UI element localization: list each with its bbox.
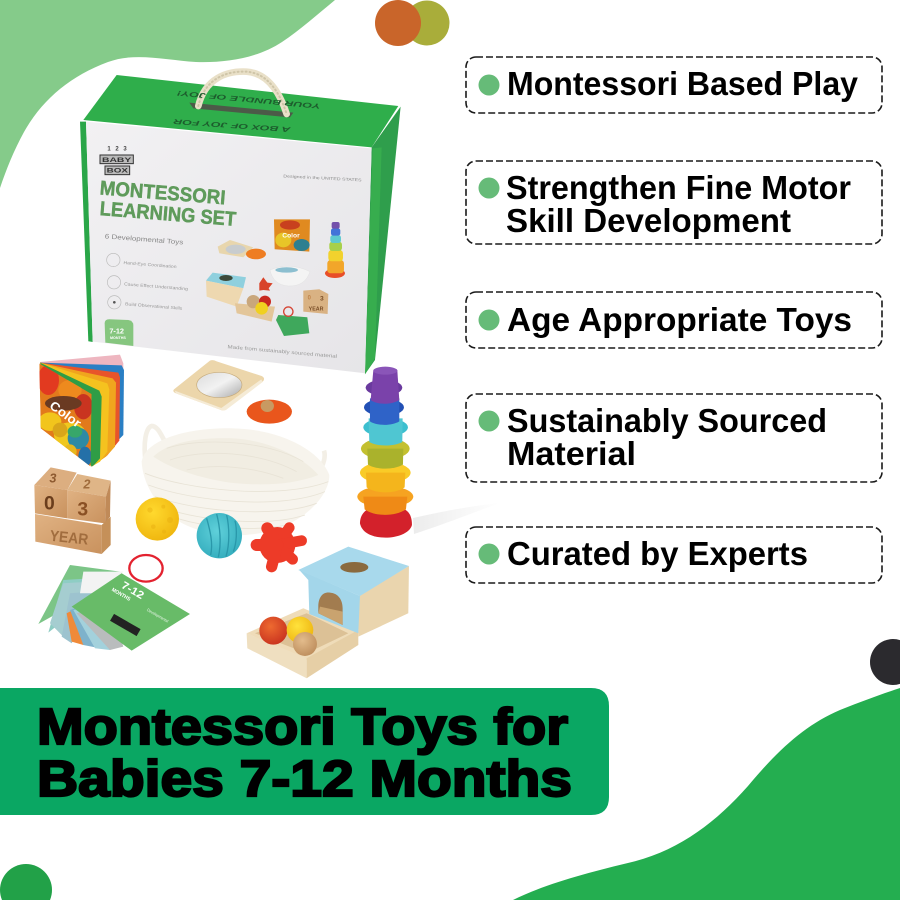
box top face [83, 75, 398, 147]
age badge: 7-12 [109, 326, 124, 335]
rope basket [142, 426, 329, 535]
blue sensory ball [197, 513, 242, 558]
flash cards [38, 555, 190, 651]
wooden date blocks: 3 [77, 500, 88, 521]
feature 3: Age Appropriate Toys: Age Appropriate Toys [507, 301, 852, 338]
box right side strip [365, 147, 382, 374]
board book [38, 355, 124, 467]
yellow sensory ball [136, 497, 179, 541]
wooden date blocks [34, 467, 111, 554]
brand logo: 1 2 3 [107, 147, 127, 153]
box title: MONTESSORI [99, 177, 226, 209]
headline banner: Montessori Toys for [37, 698, 568, 755]
feature 5: Curated by Experts: Curated by Experts [507, 535, 808, 572]
background shape: top-left light green blob [0, 0, 335, 188]
brand logo: BOX [107, 168, 129, 175]
headline banner: Babies 7-12 Months [37, 750, 572, 807]
headline banner [0, 688, 609, 815]
box title [99, 177, 237, 231]
mini toys on box: Color [282, 232, 300, 239]
mini toys on box: 0 [308, 295, 312, 301]
age badge: MONTHS [110, 336, 126, 340]
mini toys on box: 3 [320, 296, 324, 303]
front card [72, 573, 190, 651]
feature 4: Sustainably Sourced Material: Sustainably Sourced [507, 402, 827, 439]
feature 2: Strengthen Fine Motor Skill Development [466, 161, 882, 244]
object permanence box [247, 547, 409, 678]
flash cards: Developmental [146, 607, 170, 624]
feature 4: Sustainably Sourced Material: Material [507, 435, 636, 472]
mini toys on box [206, 219, 345, 336]
flash cards: 7-12 [119, 580, 146, 602]
wooden date blocks: 0 [44, 493, 55, 514]
stacking cups [357, 367, 413, 538]
background circle: bottom-left green [0, 864, 52, 900]
box title: LEARNING SET [99, 198, 237, 231]
wooden date blocks: 2 [82, 477, 90, 491]
age badge [105, 319, 133, 346]
box front face [86, 122, 372, 373]
feature 3: Age Appropriate Toys [466, 292, 882, 348]
box benefit list [107, 253, 189, 311]
handle slot [189, 103, 293, 117]
designed in note: Designed in the UNITED STATES [283, 173, 362, 182]
product box [80, 72, 401, 374]
box subtitle: 6 Developmental Toys [105, 233, 184, 247]
card ring [129, 555, 163, 582]
wooden date blocks: 3 [49, 472, 56, 486]
flash cards: MONTHS [110, 587, 132, 603]
background shape: bottom-right green blob [513, 688, 900, 900]
mirror tile [173, 360, 264, 411]
brand logo [100, 147, 133, 175]
feature 1: Montessori Based Play: Montessori Based Play [507, 65, 859, 102]
box benefit list: Build Observational Skills [125, 301, 182, 311]
feature 1: Montessori Based Play [466, 57, 882, 113]
book cover title: Color [47, 398, 84, 431]
feature 2: Strengthen Fine Motor Skill Development: Skill Development [506, 202, 791, 239]
brand logo: BABY [102, 157, 132, 164]
background circle: dark right [870, 639, 900, 685]
wooden date blocks: YEAR [49, 528, 89, 549]
lid text: your bundle of joy: YOUR BUNDLE OF JOY! [176, 89, 321, 109]
box benefit list: Hand-Eye Coordination [123, 260, 177, 269]
feature 4: Sustainably Sourced Material [466, 394, 882, 482]
box right side [365, 107, 401, 374]
red spiky ball [257, 527, 302, 567]
mini toys on box: YEAR [309, 307, 324, 313]
toy collection [34, 355, 413, 678]
lid text: a box of joy for: A BOX OF JOY FOR [173, 117, 293, 132]
soft shadow beside stacking cups [413, 503, 500, 534]
feature 2: Strengthen Fine Motor Skill Development: Strengthen Fine Motor [506, 169, 851, 206]
box benefit list: Cause Effect Understanding [124, 281, 189, 291]
footer note: Made from sustainably sourced material [227, 344, 337, 360]
feature 5: Curated by Experts [466, 527, 882, 583]
orange peg disc [247, 400, 292, 424]
box left flap [80, 122, 93, 342]
decorative overlapping circles: orange and olive [375, 0, 450, 46]
book cover [38, 363, 93, 467]
rope handle [198, 72, 287, 114]
